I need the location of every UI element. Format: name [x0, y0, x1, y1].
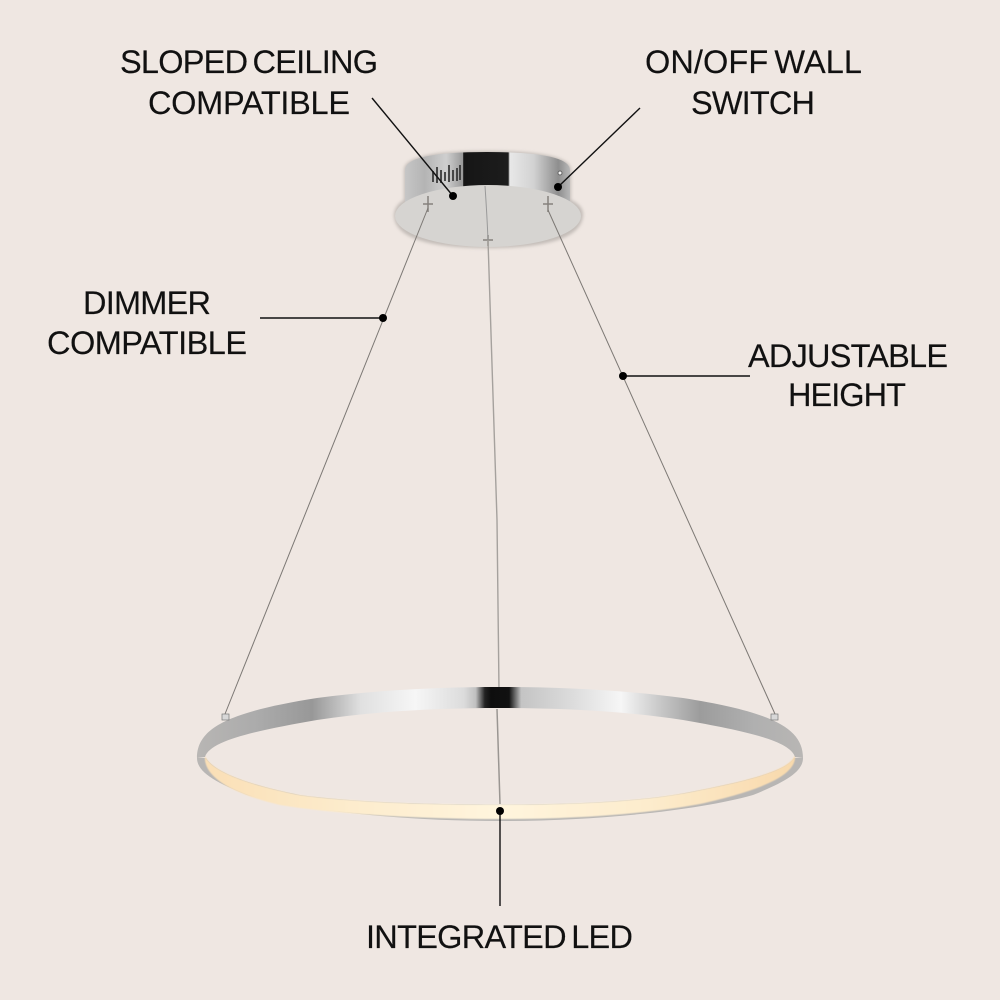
pendant lamp — [197, 151, 803, 821]
callout: on/off wall switch — [554, 44, 862, 191]
ring light — [197, 687, 803, 821]
mounting screws — [423, 196, 553, 246]
callout: integrated led — [366, 807, 633, 955]
callout: dimmer compatible: COMPATIBLE — [47, 325, 247, 361]
callout: integrated led: INTEGRATED LED — [366, 919, 633, 955]
callout: adjustable height — [619, 338, 948, 413]
ring lower rim — [197, 758, 803, 821]
LED strip — [205, 755, 795, 819]
callout: on/off wall switch: ON/OFF WALL — [645, 44, 862, 80]
callout: adjustable height: HEIGHT — [788, 377, 906, 413]
suspension wires — [225, 186, 775, 714]
callout: dimmer compatible: DIMMER — [83, 285, 211, 321]
callout: on/off wall switch: SWITCH — [691, 85, 815, 121]
callout: sloped ceiling compatible: COMPATIBLE — [148, 85, 350, 121]
vent slots — [433, 165, 460, 183]
wire clips — [222, 714, 229, 720]
ceiling canopy — [394, 151, 583, 248]
callout: sloped ceiling compatible: SLOPED CEILING — [120, 44, 378, 80]
callout: sloped ceiling compatible — [120, 44, 457, 200]
callout: adjustable height: ADJUSTABLE — [748, 338, 948, 374]
callout: dimmer compatible — [47, 285, 387, 361]
ring upper band — [197, 687, 803, 758]
ring interior — [205, 708, 795, 804]
